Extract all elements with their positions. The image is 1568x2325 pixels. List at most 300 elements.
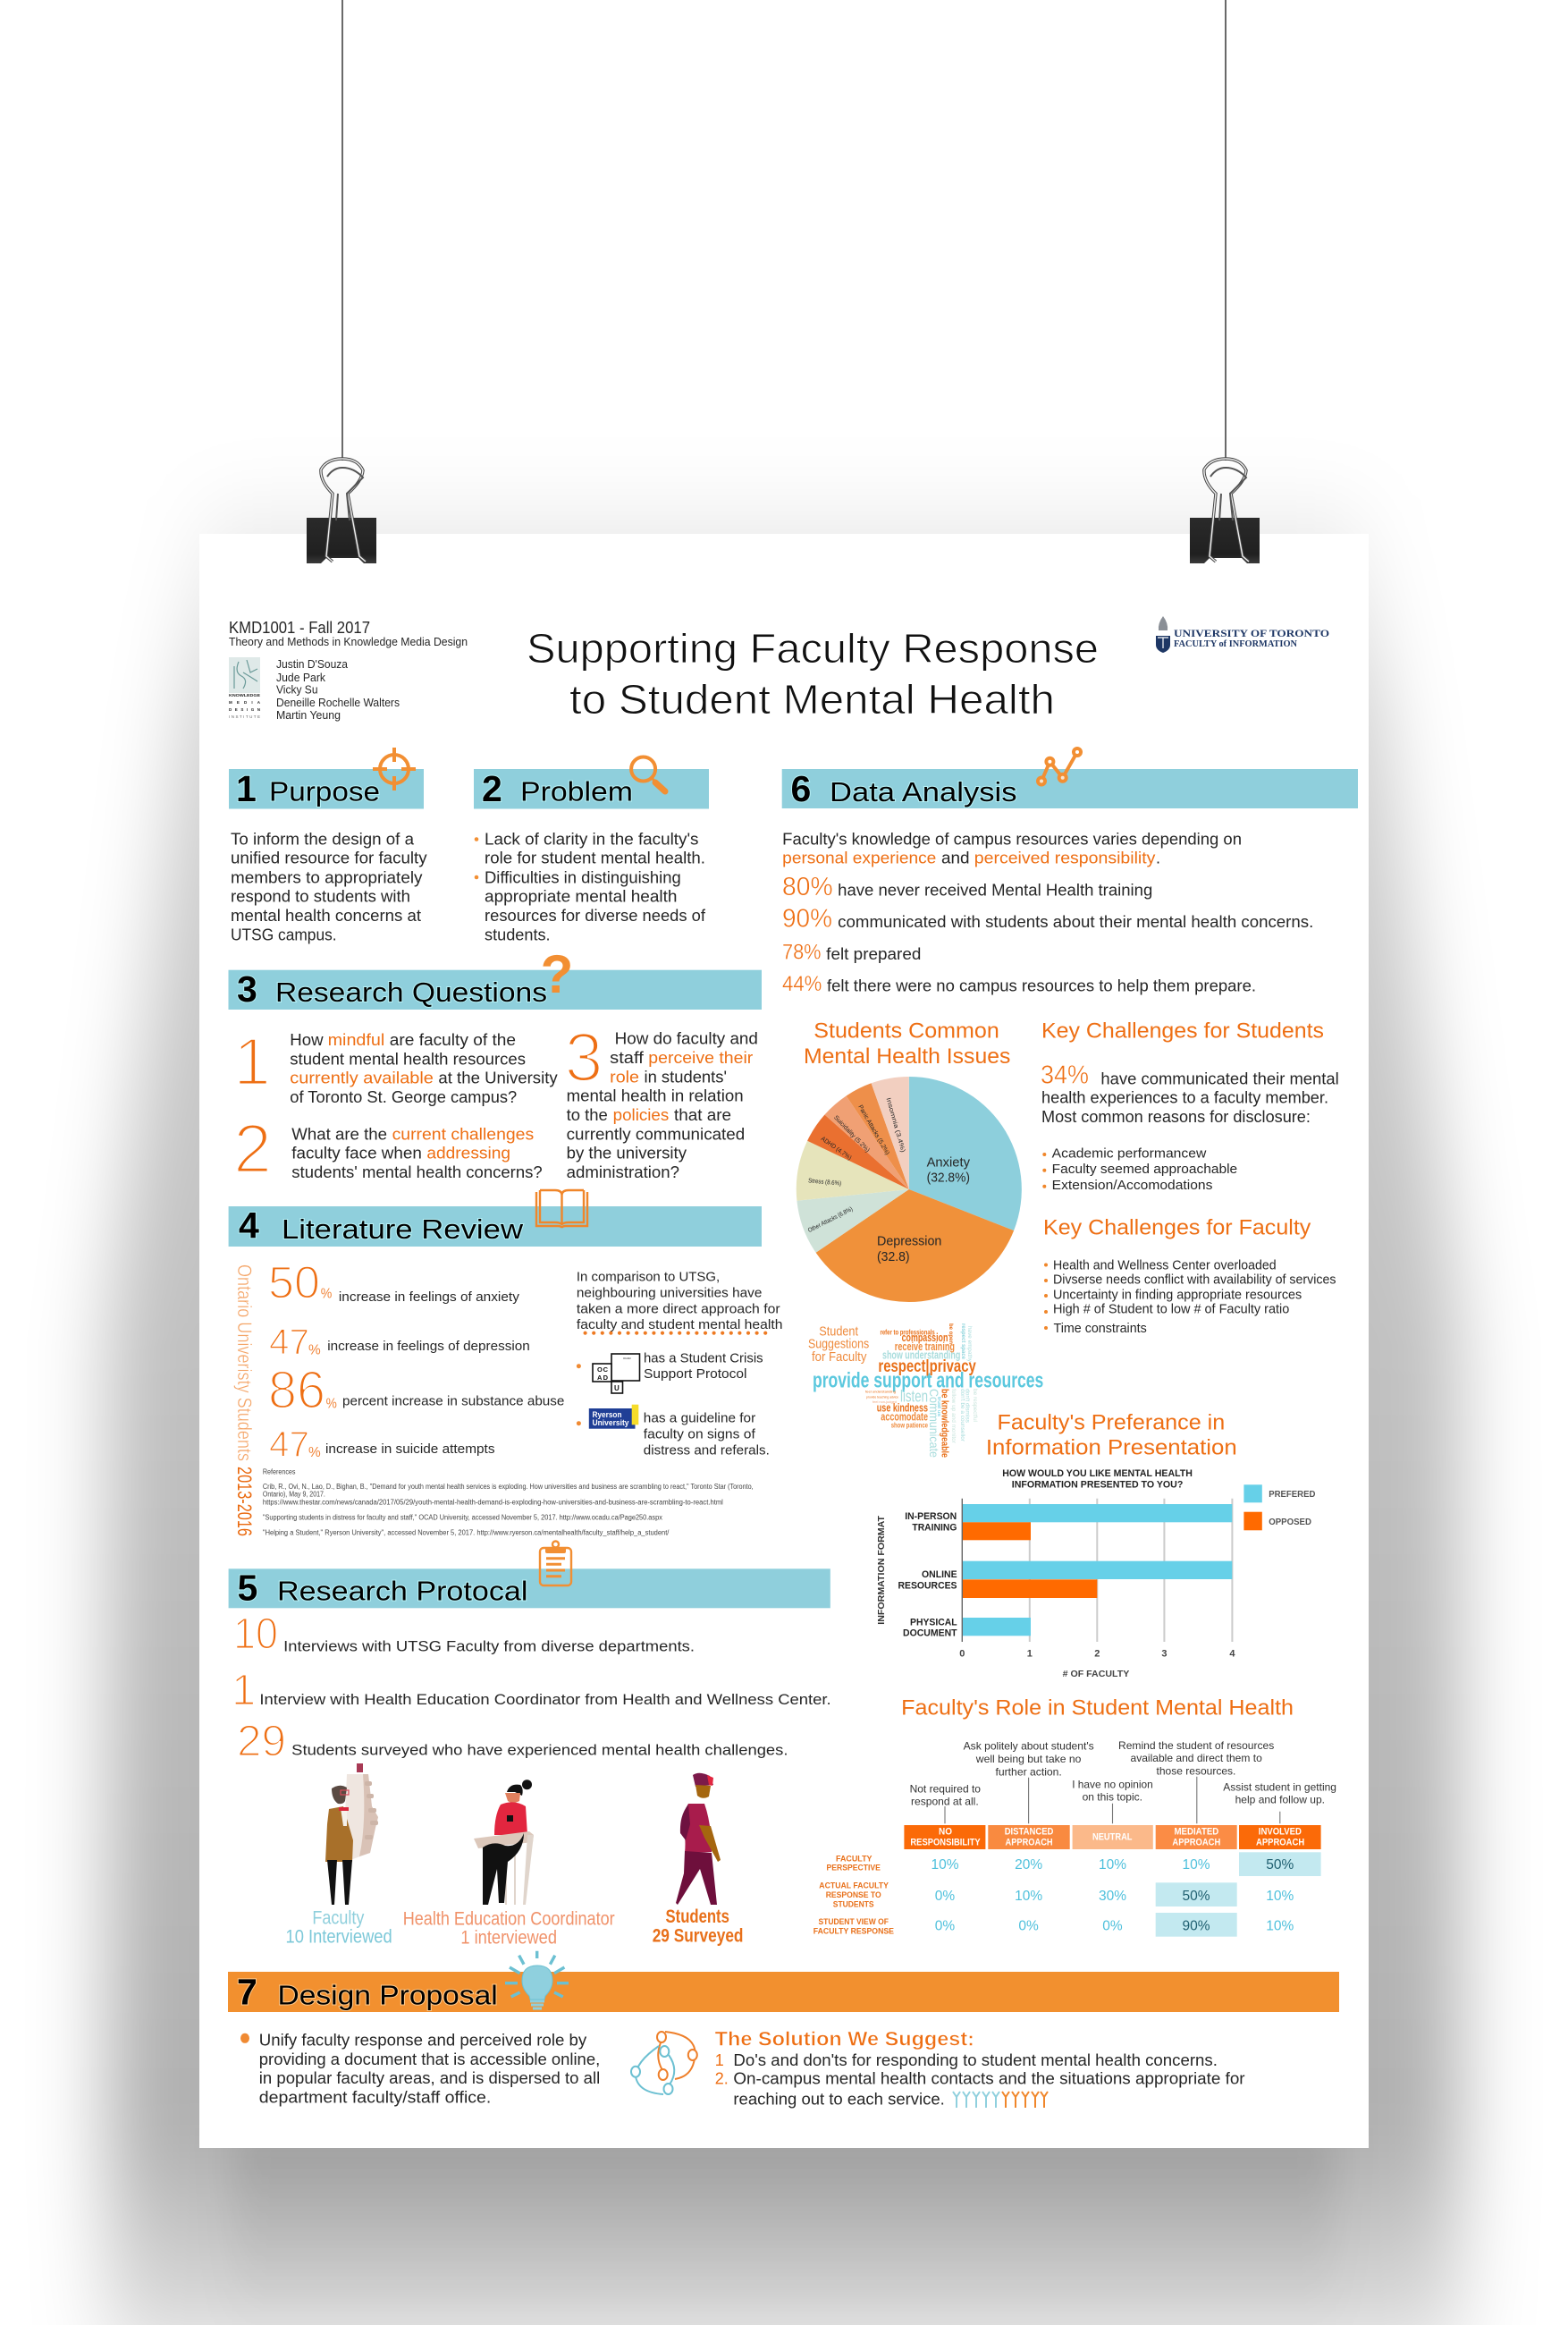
- column headers: APPROACH: [1256, 1837, 1304, 1847]
- values: 50%: [1182, 1889, 1210, 1904]
- logo: University of Toronto: [1156, 616, 1329, 653]
- logo: Knowledge Media Design Institute: INSTITUTE: [229, 714, 260, 719]
- heading bar: problem: Problem: [520, 776, 633, 807]
- column headers: RESPONSIBILITY: [910, 1837, 981, 1847]
- problem text: [475, 830, 706, 943]
- icon: light bulb: [505, 1951, 569, 2008]
- student disclosure text: have communicated their mental: [1100, 1070, 1339, 1087]
- stat: 10 interviews: Interviews with UTSG Faculty from diverse departments.: [283, 1638, 695, 1655]
- question 3 text: by the university: [567, 1145, 687, 1162]
- Ryerson item: distress and referals.: [644, 1442, 770, 1458]
- question 1 text: are faculty of the: [390, 1031, 516, 1049]
- faculty challenges list: Health and Wellness Center overloaded: [1053, 1257, 1277, 1272]
- word cloud: receive training: [895, 1340, 955, 1353]
- heading: key challenges for students: Key Challenges for Students: [1041, 1019, 1324, 1044]
- heading: students common mental health issues: [804, 1019, 1010, 1069]
- stat: 29 surveyed: Students surveyed who have experienced mental health challenges.: [291, 1742, 788, 1759]
- references: [263, 1467, 754, 1537]
- pie chart: Insomnia (3.4%): [885, 1097, 906, 1154]
- category labels: RESOURCES: [898, 1580, 957, 1591]
- heading bar: design proposal: 7: [237, 1972, 257, 2013]
- stat: 1 interview: Interview with Health Education Coordinator from Health and Wellness Center.: [259, 1691, 831, 1708]
- bar chart: information format: [876, 1468, 1316, 1679]
- logo: OCAD U: OC: [597, 1365, 609, 1374]
- question 3 text: perceive their: [648, 1049, 753, 1067]
- student disclosure text: health experiences to a faculty member.: [1041, 1089, 1328, 1107]
- pie chart: [797, 1077, 1022, 1302]
- faculty challenges list: Uncertainty in finding appropriate resources: [1053, 1287, 1302, 1302]
- pie chart: Stress (8.6%): [808, 1178, 841, 1188]
- question 3 text: to the: [567, 1106, 608, 1124]
- question 3 text: currently communicated: [567, 1125, 745, 1143]
- role table: [814, 1739, 1336, 1937]
- heading: faculty's preferance: [986, 1410, 1237, 1460]
- stat: 50% anxiety: [268, 1257, 519, 1308]
- pie chart: (32.8): [877, 1249, 910, 1264]
- stat: 78%: [782, 941, 921, 965]
- student reasons list: Extension/Accomodations: [1052, 1178, 1212, 1193]
- stat: 10 interviews: 10: [233, 1610, 278, 1658]
- background shadow: [107, 501, 1461, 2325]
- x axis ticks: 1: [1027, 1648, 1033, 1659]
- logo: OCAD U: [593, 1354, 640, 1393]
- legend: PREFERED: [1269, 1489, 1316, 1500]
- values: 10%: [1015, 1889, 1042, 1904]
- stat: 10 interviews: [233, 1610, 695, 1658]
- question 3 text: policies: [613, 1106, 669, 1124]
- question 3 text: mental health in relation: [567, 1087, 744, 1105]
- title: [527, 625, 1099, 723]
- row labels: FACULTY: [836, 1854, 873, 1864]
- poster sheet: [199, 534, 1369, 2148]
- references: Crib, R., Ovi, N., Lao, D., Bighan, B., "Demand for youth mental health services is exploding. How universities and business are scrambling to react," Toronto Star (Toronto,: [263, 1483, 754, 1491]
- stat: 47% suicide attempts: [269, 1424, 495, 1465]
- label: students: [653, 1906, 744, 1947]
- purpose text: To inform the design of a: [231, 830, 415, 848]
- question 1 text: mindful: [328, 1031, 384, 1049]
- heading: students common mental health issues: Mental Health Issues: [804, 1044, 1010, 1069]
- stat: 47% suicide attempts: 47: [269, 1424, 309, 1465]
- solution list: [715, 2051, 1245, 2108]
- references: https://www.thestar.com/news/canada/2017/05/29/youth-mental-health-demand-is-exploding-how-universities-and-business-are-scrambling-to-react.html: [263, 1498, 723, 1506]
- section 4: literature review: [229, 1190, 783, 1537]
- purpose text: members to appropriately: [231, 868, 422, 886]
- heading bar: research questions: Research Questions: [275, 976, 547, 1008]
- vertical label: 2013-2016: [233, 1467, 256, 1536]
- intro text: [782, 830, 1242, 867]
- stat: 80%: 80%: [782, 873, 833, 901]
- label: student suggestions for faculty: for Faculty: [812, 1349, 867, 1365]
- word cloud: Communicate: [927, 1389, 941, 1458]
- question 3 text: in students': [644, 1068, 727, 1086]
- student disclosure text: [1041, 1061, 1339, 1126]
- references: References: [263, 1467, 295, 1475]
- stat: 80%: have never received Mental Health training: [838, 882, 1152, 900]
- proposal text: in popular faculty areas, and is dispersed to all: [259, 2069, 600, 2087]
- values: 0%: [935, 1918, 955, 1933]
- annotations: on this topic.: [1083, 1790, 1142, 1803]
- heading bar: purpose: 1: [236, 768, 257, 809]
- annotations: Not required to: [910, 1782, 981, 1795]
- legend: [1243, 1484, 1316, 1530]
- y axis title: INFORMATION FORMAT: [876, 1515, 887, 1625]
- authors: Deneille Rochelle Walters: [276, 697, 400, 709]
- row labels: STUDENT VIEW OF: [819, 1917, 889, 1927]
- heading bar: research questions: [229, 968, 762, 1010]
- label: student suggestions for faculty: Suggestions: [808, 1337, 869, 1352]
- stat: 80%: [782, 873, 1152, 901]
- stat: 29 surveyed: 29: [237, 1717, 286, 1765]
- student reasons list: [1042, 1146, 1237, 1193]
- pie chart: Panic Attacks (5.2%): [856, 1104, 890, 1156]
- stat: 1 interview: 1: [232, 1667, 256, 1715]
- logo: University of Toronto: FACULTY of INFORMATION: [1174, 639, 1297, 649]
- stat: 47% suicide attempts: increase in suicide attempts: [325, 1442, 495, 1457]
- course info: Theory and Methods in Knowledge Media Design: [229, 636, 468, 648]
- label: students: 29 Surveyed: [653, 1926, 744, 1947]
- stat: 47% depression: %: [308, 1342, 321, 1357]
- question 2 text: faculty face when: [291, 1145, 422, 1162]
- stat: 29 surveyed: [237, 1717, 788, 1765]
- authors: Martin Yeung: [276, 709, 341, 722]
- purpose text: unified resource for faculty: [231, 850, 427, 867]
- binder clip left: [307, 459, 376, 563]
- word cloud: provide teaching advice: [866, 1395, 898, 1399]
- heading bar: design proposal: Design Proposal: [277, 1980, 498, 2011]
- heading bar: research protocal: 5: [238, 1567, 257, 1608]
- icon: question mark: ?: [541, 944, 573, 1004]
- stat: 90%: 90%: [782, 905, 832, 934]
- logo: Ryerson University: Ryerson: [592, 1410, 622, 1420]
- course info: KMD1001 - Fall 2017: [229, 619, 370, 637]
- question 3 text: [567, 1030, 758, 1181]
- intro text: .: [1156, 850, 1160, 867]
- intro text: personal experience: [782, 850, 936, 867]
- comparison text: In comparison to UTSG,: [577, 1270, 720, 1285]
- heading bar: literature review: Literature Review: [282, 1213, 524, 1245]
- heading bar: research protocal: [229, 1567, 830, 1608]
- label: health education coordinator: [403, 1908, 615, 1948]
- section 3: research questions: [229, 944, 762, 1188]
- word cloud: respect space: [960, 1323, 965, 1360]
- icon: connected cycle: [631, 2032, 697, 2094]
- annotations: I have no opinion: [1072, 1778, 1153, 1790]
- stat: 78%: felt prepared: [826, 945, 921, 963]
- title: to Student Mental Health: [569, 676, 1055, 723]
- question 2 text: current challenges: [392, 1125, 534, 1143]
- heading bar: data analysis: 6: [790, 768, 811, 809]
- heading bar: problem: 2: [482, 768, 502, 809]
- solution list: On-campus mental health contacts and the situations appropriate for: [733, 2070, 1245, 2088]
- heading bar: purpose: Purpose: [269, 776, 380, 807]
- annotations: well being but take no: [975, 1753, 1082, 1765]
- Ryerson item: has a guideline for: [644, 1411, 755, 1426]
- values: 10%: [1266, 1889, 1294, 1904]
- label: student suggestions for faculty: [808, 1323, 869, 1365]
- proposal text: [240, 2032, 600, 2107]
- student reasons list: Faculty seemed approachable: [1052, 1162, 1237, 1177]
- category labels: [898, 1511, 957, 1639]
- problem text: Lack of clarity in the faculty's: [485, 830, 699, 848]
- category labels: DOCUMENT: [903, 1628, 957, 1639]
- column headers: NO: [939, 1827, 952, 1838]
- proposal text: Unify faculty response and perceived role by: [259, 2032, 586, 2050]
- purpose text: respond to students with: [231, 888, 410, 906]
- stat: 44%: 44%: [782, 972, 822, 996]
- problem text: role for student mental health.: [485, 850, 705, 867]
- student reasons list: Academic performancew: [1052, 1146, 1206, 1161]
- stat: 44%: felt there were no campus resources to help them prepare.: [827, 977, 1256, 995]
- word cloud: show understanding: [882, 1348, 960, 1361]
- intro text: Faculty's knowledge of campus resources varies depending on: [782, 830, 1242, 848]
- row labels: PERSPECTIVE: [826, 1864, 881, 1873]
- comparison text: neighbouring universities have: [577, 1285, 762, 1300]
- illustration: student walking: [676, 1773, 721, 1905]
- stat: 86% substance abuse: %: [326, 1396, 337, 1411]
- category labels: ONLINE: [922, 1569, 957, 1580]
- word cloud: feel non-judged: [873, 1400, 897, 1404]
- pie chart: Other Attacks (6.8%): [807, 1206, 854, 1234]
- word cloud: show patience: [891, 1422, 928, 1430]
- logo: Ryerson University: University: [592, 1418, 629, 1428]
- label: faculty: Faculty: [312, 1908, 365, 1929]
- annotations: further action.: [996, 1765, 1062, 1778]
- heading bar: research protocal: Research Protocal: [277, 1575, 527, 1606]
- hanging wire right: [1225, 0, 1227, 461]
- x axis ticks: 2: [1094, 1648, 1100, 1659]
- solution heading: The Solution We Suggest:: [715, 2028, 974, 2050]
- section 2: problem: [474, 757, 709, 943]
- question 3 text: staff: [610, 1049, 645, 1067]
- label: faculty: 10 Interviewed: [286, 1927, 392, 1948]
- chart title: [1002, 1468, 1193, 1490]
- comparison text: faculty and student mental health: [577, 1317, 783, 1332]
- question 3 text: that are: [674, 1106, 731, 1124]
- values: 50%: [1266, 1857, 1294, 1873]
- chart title: HOW WOULD YOU LIKE MENTAL HEALTH: [1002, 1468, 1193, 1479]
- illustration: health education coordinator at desk: [474, 1780, 534, 1905]
- values: 10%: [1182, 1857, 1210, 1873]
- references: Ontario), May 9, 2017.: [263, 1491, 325, 1499]
- heading bar: data analysis: Data Analysis: [830, 776, 1017, 807]
- title: Supporting Faculty Response: [527, 625, 1099, 672]
- category labels: PHYSICAL: [910, 1617, 957, 1628]
- OCAD item: Support Protocol: [644, 1366, 747, 1382]
- label: faculty: [286, 1908, 392, 1948]
- stat: 47% depression: increase in feelings of depression: [327, 1339, 530, 1354]
- word cloud: refer to professionals: [880, 1329, 935, 1337]
- binder clip right: [1190, 459, 1260, 563]
- hanging wire left: [341, 0, 343, 461]
- word cloud: be open: [948, 1323, 953, 1344]
- authors: Justin D'Souza: [276, 658, 348, 671]
- problem text: appropriate mental health: [485, 888, 678, 906]
- logo: OCAD U: AD: [597, 1374, 609, 1382]
- stat: 90%: [782, 905, 1313, 934]
- word cloud: don't dismiss: [964, 1389, 969, 1423]
- illustration: faculty member carrying papers: [325, 1763, 378, 1905]
- section 7: design proposal: [228, 1951, 1339, 2108]
- icon: row of people: [953, 2092, 1048, 2108]
- question numeral 1: 1: [233, 1024, 271, 1099]
- x axis ticks: 4: [1229, 1648, 1235, 1659]
- annotations: Assist student in getting: [1223, 1780, 1336, 1793]
- column headers: APPROACH: [1172, 1837, 1220, 1847]
- heading bar: literature review: 4: [239, 1205, 259, 1246]
- intro text: perceived responsibility: [974, 850, 1155, 867]
- word cloud: listen: [900, 1387, 928, 1405]
- stat: 44%: [782, 972, 1256, 996]
- word cloud: [813, 1323, 1043, 1458]
- word cloud: don't be a counsellor: [959, 1389, 965, 1442]
- pie chart: Depression: [877, 1233, 941, 1248]
- chart title: INFORMATION PRESENTED TO YOU?: [1012, 1479, 1184, 1490]
- heading: faculty's preferance: Faculty's Preferance in: [998, 1410, 1225, 1434]
- x axis ticks: 3: [1161, 1648, 1167, 1659]
- question 1 text: [290, 1031, 558, 1106]
- heading bar: literature review: [229, 1205, 762, 1247]
- word cloud: accomodate: [881, 1410, 928, 1424]
- question 2 text: addressing: [426, 1145, 510, 1162]
- pie chart: Anxiety: [927, 1154, 970, 1170]
- values: 90%: [1182, 1918, 1210, 1933]
- Ryerson item: faculty on signs of: [644, 1427, 756, 1442]
- purpose text: mental health concerns at: [231, 907, 421, 925]
- pie chart: (32.8%): [927, 1171, 970, 1186]
- icon: line chart: [1038, 748, 1081, 785]
- heading: students common mental health issues: Students Common: [814, 1019, 999, 1044]
- logo: Knowledge Media Design Institute: KNOWLEDGE: [229, 693, 260, 698]
- column headers: DISTANCED: [1005, 1827, 1053, 1838]
- logo: Ryerson University: [589, 1405, 638, 1429]
- logo: OCAD U: U: [614, 1384, 620, 1392]
- stat: 47% depression: [269, 1321, 530, 1362]
- row labels: STUDENTS: [833, 1899, 874, 1909]
- question 1 text: How: [290, 1031, 325, 1049]
- section 5: research protocal: [229, 1542, 831, 1948]
- authors: [276, 658, 400, 722]
- highlighted cells: [1156, 1852, 1321, 1937]
- heading bar: problem: [474, 768, 709, 809]
- comparison text: taken a more direct approach for: [577, 1301, 780, 1316]
- Ryerson item: [577, 1405, 770, 1458]
- values: 20%: [1015, 1857, 1042, 1873]
- references: "Helping a Student," Ryerson University", accessed November 5, 2017. http://www.ryerson.ca/mentalhealth/faculty_staff/help_a_student/: [263, 1529, 670, 1537]
- OCAD item: [577, 1350, 763, 1393]
- column headers: NEUTRAL: [1092, 1831, 1133, 1842]
- word cloud: respect|privacy: [878, 1357, 976, 1376]
- solution list: 2.: [715, 2070, 729, 2088]
- solution list: Do's and don'ts for responding to student mental health concerns.: [733, 2051, 1218, 2069]
- question 1 text: student mental health resources: [290, 1050, 526, 1068]
- label: health education coordinator: Health Education Coordinator: [403, 1908, 615, 1929]
- purpose text: [231, 830, 427, 943]
- row labels: RESPONSE TO: [826, 1890, 881, 1900]
- stat: 86% substance abuse: [268, 1360, 564, 1419]
- question 3 text: administration?: [567, 1163, 679, 1181]
- heading bar: purpose: [229, 768, 424, 809]
- values: 30%: [1099, 1889, 1126, 1904]
- logo: Knowledge Media Design Institute: DESIGN: [229, 707, 260, 712]
- stat: 86% substance abuse: percent increase in substance abuse: [342, 1394, 564, 1409]
- values: 10%: [1099, 1857, 1126, 1873]
- faculty challenges list: Divserse needs conflict with availability of services: [1053, 1272, 1336, 1288]
- proposal text: department faculty/staff office.: [259, 2089, 491, 2107]
- annotations: those resources.: [1157, 1764, 1235, 1777]
- logo: Knowledge Media Design Institute: MEDIA: [229, 700, 261, 705]
- solution list: 1: [715, 2051, 724, 2069]
- stat: 47% suicide attempts: %: [308, 1445, 321, 1460]
- stat: 86% substance abuse: 86: [268, 1360, 325, 1419]
- heading: key challenges for faculty: Key Challenges for Faculty: [1043, 1216, 1311, 1240]
- section 1: purpose: [229, 748, 427, 943]
- stat: 90%: communicated with students about their mental health concerns.: [838, 913, 1313, 931]
- annotations: help and follow up.: [1235, 1793, 1325, 1805]
- row labels: [814, 1854, 894, 1936]
- values: 10%: [931, 1857, 959, 1873]
- question 1 text: at the University: [438, 1070, 558, 1087]
- stat: 50% anxiety: 50: [268, 1257, 320, 1308]
- question numeral 3: 3: [565, 1019, 603, 1096]
- values: [931, 1857, 1294, 1933]
- annotations: available and direct them to: [1130, 1752, 1262, 1764]
- stat: 78%: 78%: [782, 941, 821, 965]
- logo: OCAD U: OCAD: [623, 1357, 632, 1360]
- stat: 47% depression: 47: [269, 1321, 309, 1362]
- stat: 50% anxiety: increase in feelings of anxiety: [339, 1289, 519, 1305]
- proposal text: providing a document that is accessible online,: [259, 2050, 600, 2068]
- vertical label: Ontario Univeristy Students: [233, 1264, 256, 1461]
- authors: Jude Park: [276, 672, 326, 684]
- problem text: resources for diverse needs of: [485, 907, 706, 925]
- word cloud: compassion: [902, 1331, 948, 1344]
- question 1 text: of Toronto St. George campus?: [290, 1088, 517, 1106]
- word cloud: be respectful: [972, 1389, 977, 1422]
- OCAD item: has a Student Crisis: [644, 1350, 763, 1365]
- comparison text: [577, 1270, 783, 1333]
- label: health education coordinator: 1 interviewed: [460, 1927, 557, 1948]
- problem text: students.: [485, 926, 551, 943]
- student disclosure text: Most common reasons for disclosure:: [1041, 1108, 1311, 1126]
- logo: Knowledge Media Design Institute: [229, 657, 261, 719]
- word cloud: be knowledgeable: [939, 1389, 949, 1458]
- values: 0%: [1018, 1918, 1039, 1933]
- row labels: ACTUAL FACULTY: [819, 1881, 889, 1891]
- x axis ticks: [959, 1648, 1235, 1659]
- question 3 text: role: [610, 1068, 639, 1086]
- pie chart: ADHD (4.7%): [820, 1136, 853, 1162]
- legend: OPPOSED: [1269, 1517, 1311, 1527]
- bars: [962, 1504, 1232, 1636]
- x axis title: # OF FACULTY: [1063, 1669, 1129, 1679]
- section 6: data analysis: [782, 748, 1358, 1937]
- icon: target: [373, 748, 416, 790]
- word cloud: provide support and resources: [813, 1369, 1043, 1393]
- heading bar: design proposal: [228, 1972, 1339, 2013]
- logo: University of Toronto: UNIVERSITY OF TORONTO: [1174, 627, 1329, 639]
- heading bar: data analysis: [782, 768, 1358, 809]
- faculty challenges list: High # of Student to low # of Faculty ratio: [1053, 1302, 1289, 1317]
- intro text: and: [941, 850, 970, 867]
- label: student suggestions for faculty: Student: [819, 1323, 859, 1339]
- values: 0%: [1102, 1918, 1123, 1933]
- question 2 text: [291, 1125, 543, 1181]
- x axis ticks: 0: [959, 1648, 965, 1659]
- references: "Supporting students in distress for faculty and staff," OCAD University, accessed November 5, 2017. http://www.ocadu.ca/Page250.aspx: [263, 1513, 662, 1521]
- label: students: Students: [665, 1906, 729, 1927]
- icon: clipboard: [540, 1542, 571, 1585]
- question 1 text: currently available: [290, 1070, 434, 1087]
